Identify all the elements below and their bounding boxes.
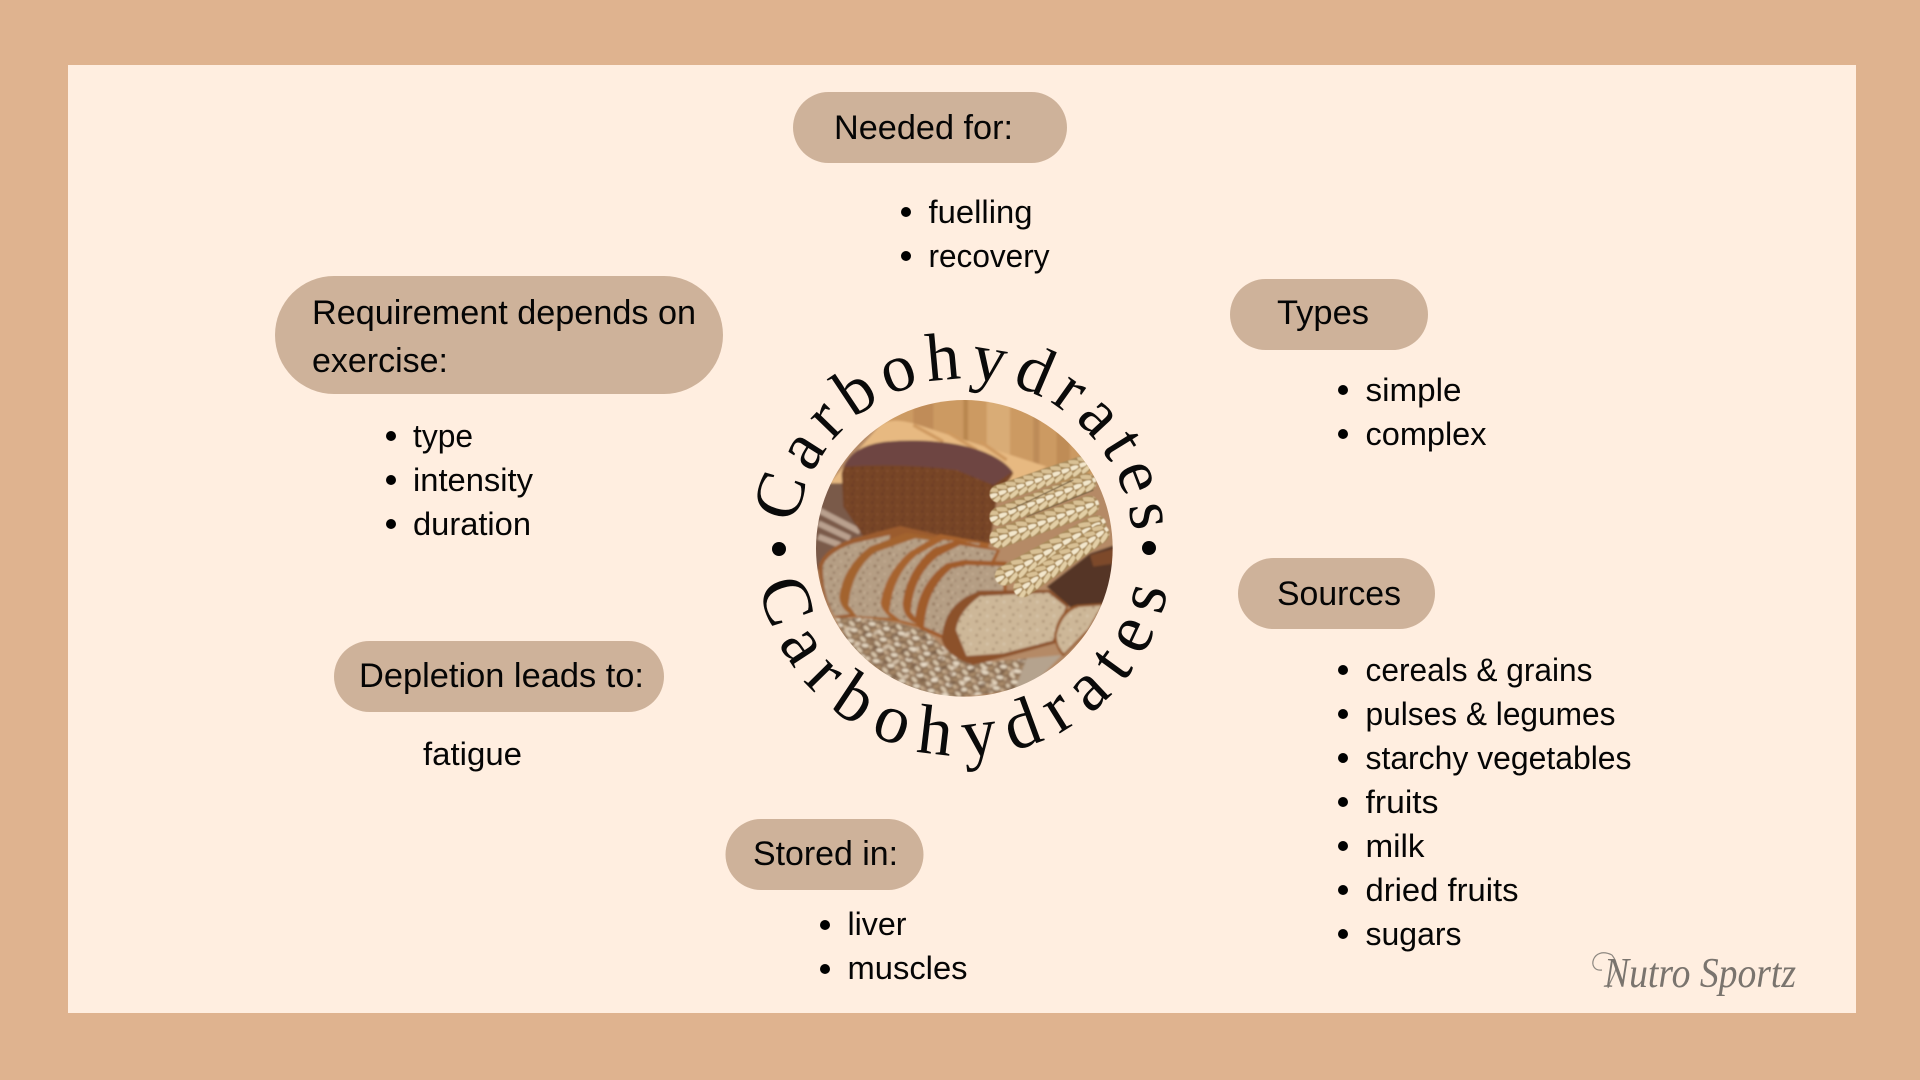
list: sources bbox=[1338, 652, 1632, 952]
separator dot right bbox=[1142, 541, 1156, 555]
heading pill: Sources bbox=[1238, 558, 1435, 629]
heading pill: Depletion leads to bbox=[334, 641, 664, 712]
list: requirement: duration bbox=[413, 506, 531, 542]
heading pill: Needed for bbox=[793, 92, 1067, 163]
heading pill: Sources: Sources bbox=[1277, 575, 1401, 613]
list: needed for bbox=[901, 194, 1050, 274]
curved title: top Carbohydrates: Carbohydrates bbox=[757, 333, 1163, 528]
list: sources: milk bbox=[1366, 828, 1426, 864]
heading pill: Stored in: Stored in: bbox=[753, 835, 898, 873]
heading pill: Types bbox=[1230, 279, 1428, 350]
list: sources: sugars bbox=[1366, 916, 1462, 952]
list: stored in: liver bbox=[848, 906, 907, 942]
circular photo: bread and wheat bbox=[813, 397, 1117, 700]
heading pill: Types: Types bbox=[1277, 294, 1369, 332]
text: fatigue: fatigue bbox=[423, 736, 522, 772]
list: types: complex bbox=[1366, 416, 1486, 452]
heading pill: Requirement depends on exercise bbox=[275, 276, 723, 394]
list: types bbox=[1338, 372, 1486, 452]
list: stored in bbox=[820, 906, 968, 986]
wheat ears bbox=[987, 453, 1113, 601]
curved title: bottom Carbohydrates: Carbohydrates bbox=[763, 580, 1166, 772]
list: requirement bbox=[386, 418, 533, 542]
list: stored in: muscles bbox=[848, 950, 968, 986]
separator dot left bbox=[772, 542, 786, 556]
list: sources: fruits bbox=[1366, 784, 1438, 820]
heading pill: Requirement depends on exercise: exercise: bbox=[312, 342, 448, 380]
list: requirement: type bbox=[413, 418, 473, 454]
signature: Nutro Sportz: Nutro Sportz bbox=[1603, 951, 1796, 997]
heading pill: Needed for: Needed for: bbox=[834, 109, 1013, 147]
list: sources: starchy vegetables bbox=[1366, 740, 1632, 776]
list: requirement: intensity bbox=[413, 462, 533, 498]
list: needed for: fuelling bbox=[928, 194, 1032, 230]
list: types: simple bbox=[1366, 372, 1462, 408]
heading pill: Depletion leads to: Depletion leads to: bbox=[359, 657, 644, 695]
list: sources: cereals & grains bbox=[1366, 652, 1592, 688]
heading pill: Stored in bbox=[726, 819, 924, 890]
list: needed for: recovery bbox=[928, 238, 1050, 274]
heading pill: Requirement depends on exercise: Requirement depends on bbox=[312, 294, 696, 332]
list: sources: pulses & legumes bbox=[1366, 696, 1616, 732]
list: sources: dried fruits bbox=[1366, 872, 1518, 908]
